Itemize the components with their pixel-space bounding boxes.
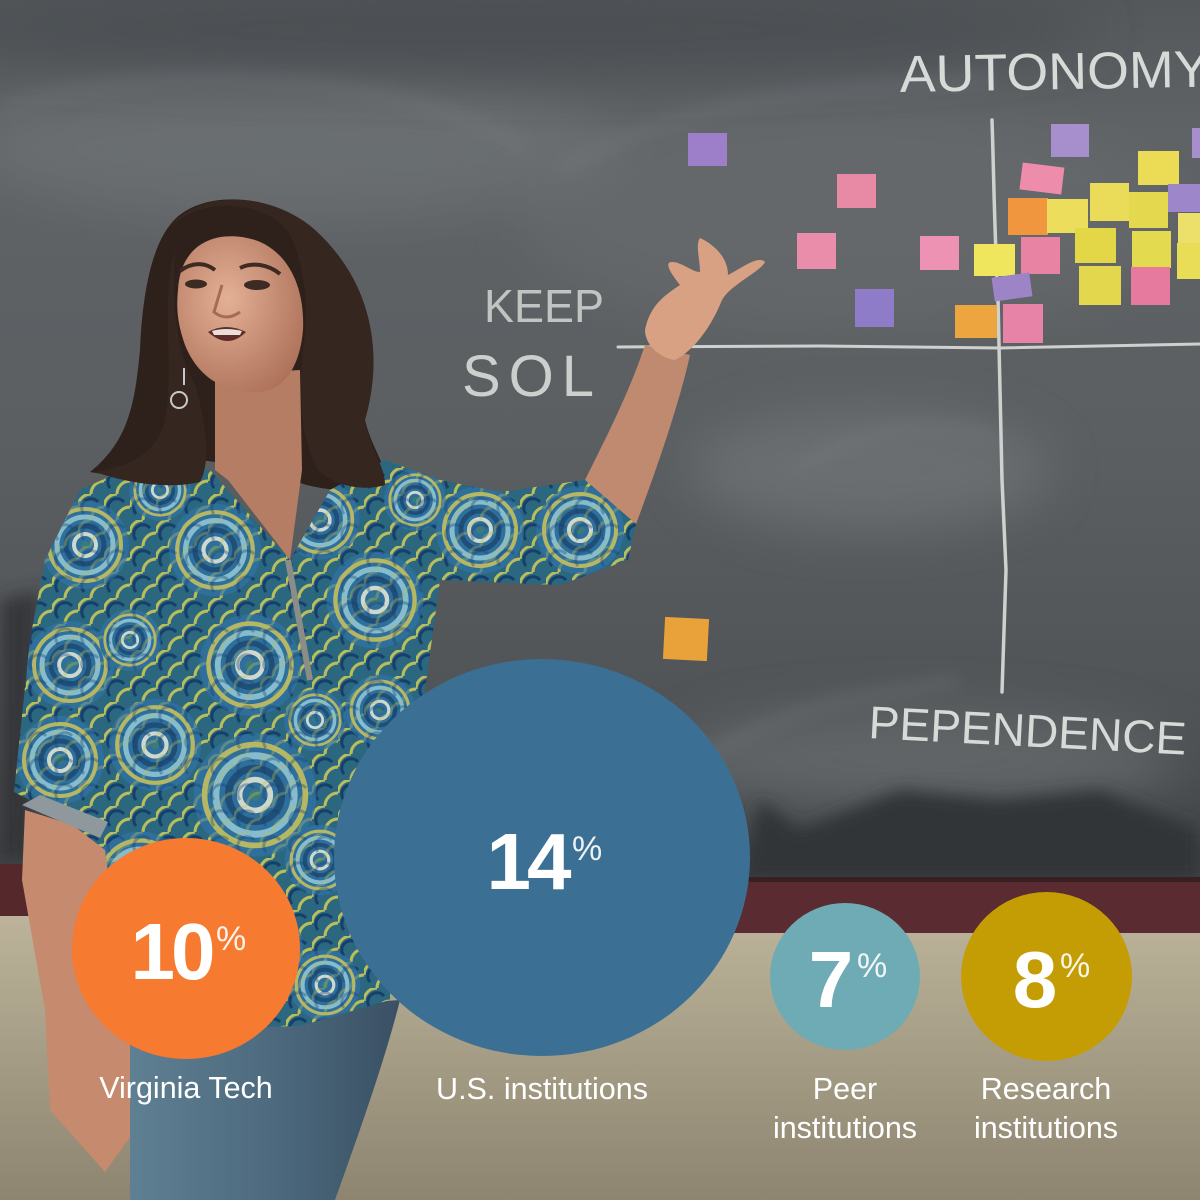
cuff lining [22, 795, 108, 838]
circle: Peer institutions: institutions [773, 1111, 917, 1145]
circle: Research institutions: institutions [974, 1111, 1118, 1145]
chalk tray [0, 864, 1200, 933]
blouse zipper [288, 560, 310, 680]
circle: U.S. institutions [334, 659, 750, 1106]
hair back [90, 199, 386, 490]
circle: U.S. institutions: % [572, 830, 602, 868]
person [0, 199, 765, 1200]
sticky notes [663, 124, 1200, 661]
jeans [130, 1000, 400, 1200]
chalk word: dependence: PEPENDENCE [867, 696, 1188, 765]
chalk word: sol: SOL [462, 344, 594, 409]
circle: Research institutions: Research [981, 1072, 1111, 1106]
circle: Research institutions [961, 892, 1132, 1145]
neck and chest [215, 370, 302, 560]
face details [180, 264, 280, 341]
circle: Virginia Tech [72, 838, 300, 1105]
earring [171, 368, 187, 408]
circle: Peer institutions [770, 903, 920, 1145]
hand [645, 238, 765, 360]
circle: U.S. institutions: 14 [487, 817, 572, 906]
left arm and hand [22, 810, 135, 1172]
circle: Virginia Tech: % [216, 920, 246, 958]
wall [0, 916, 1200, 1200]
background: chalkboard [0, 0, 1200, 880]
hair front [170, 200, 385, 488]
circle: Peer institutions: % [857, 947, 887, 985]
circle: Virginia Tech: 10 [131, 907, 213, 996]
circle: Virginia Tech: Virginia Tech [99, 1071, 273, 1105]
circle: Peer institutions: 7 [809, 935, 853, 1024]
chalk word: keep: KEEP [484, 280, 604, 332]
circle: U.S. institutions: U.S. institutions [436, 1072, 648, 1106]
circle: Research institutions: % [1060, 947, 1090, 985]
raised forearm [585, 345, 690, 524]
shirt [14, 460, 636, 1027]
circle: Peer institutions: Peer [813, 1072, 877, 1106]
circle: Research institutions: 8 [1013, 935, 1057, 1024]
chalk axes [618, 120, 1200, 692]
face [177, 236, 303, 392]
chalk word: autonomy: AUTONOMY [899, 41, 1200, 104]
